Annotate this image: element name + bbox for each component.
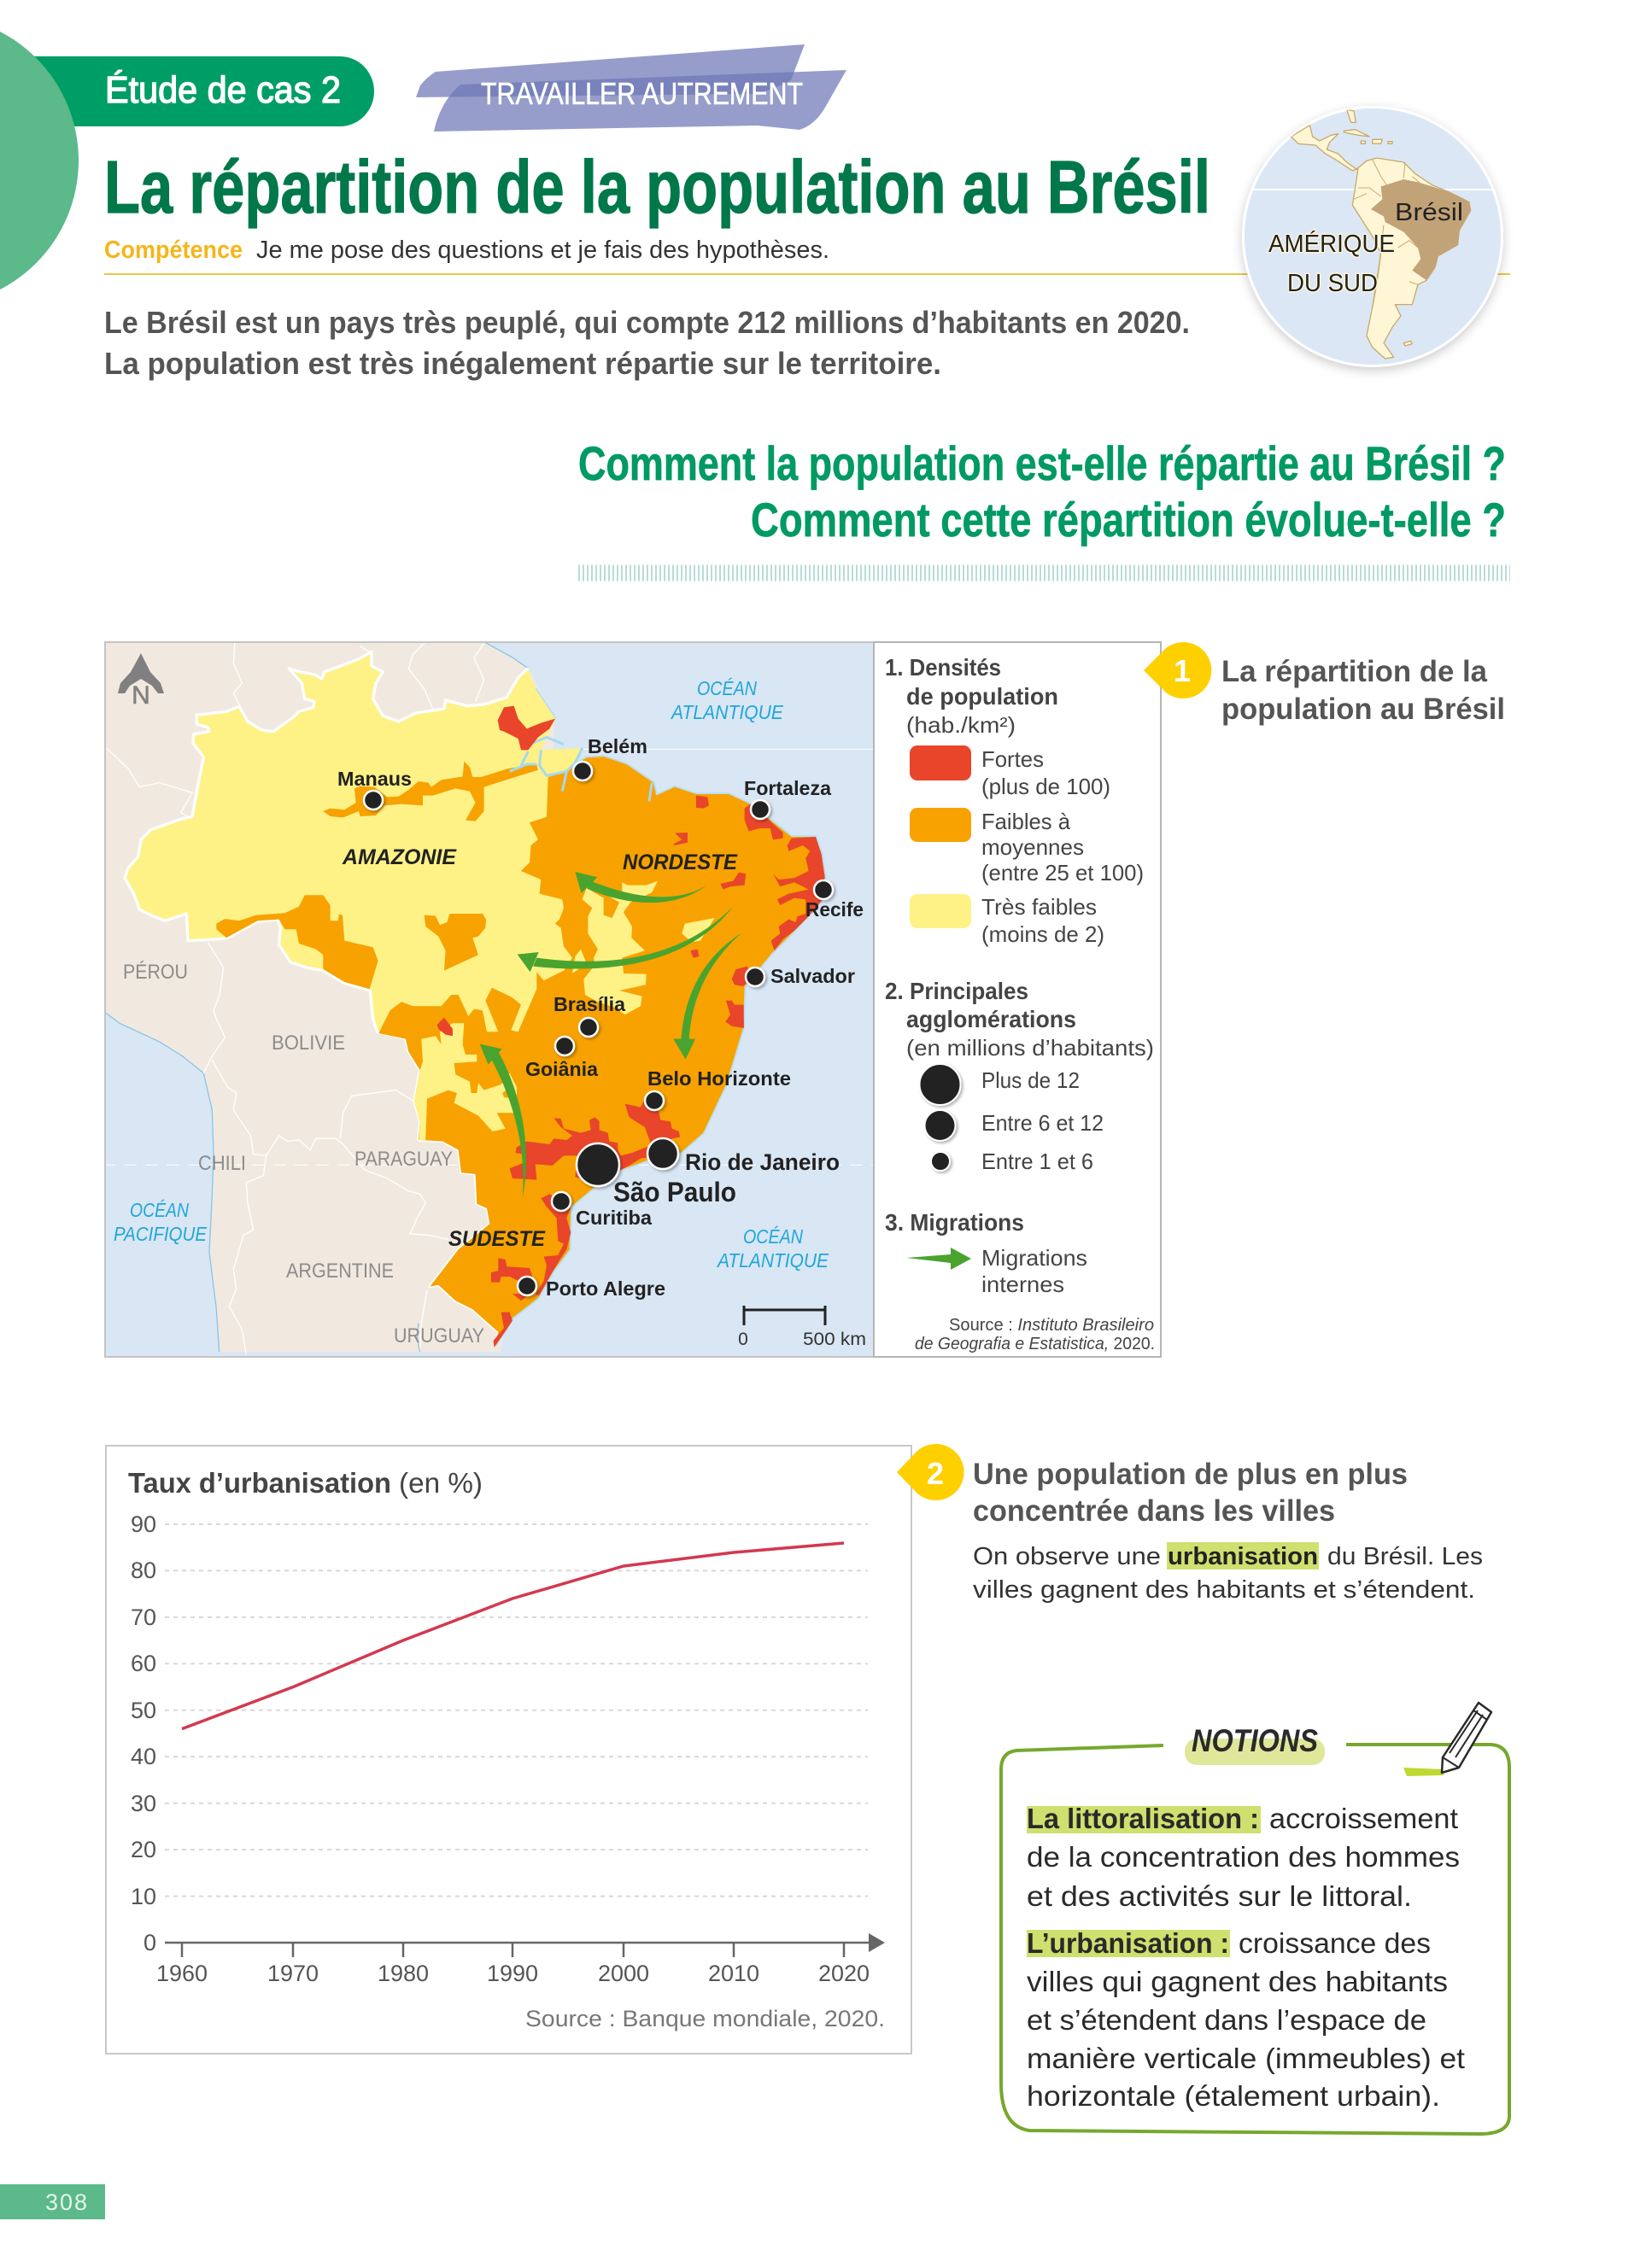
legend: source: de Geografia e Estatistica, 2020. — [915, 1335, 1155, 1353]
definition: urbanisation — [1027, 1927, 1465, 2112]
definition: littoralisation: et des activités sur le littoral. — [1027, 1880, 1412, 1912]
map panel: Brazil population density — [102, 640, 877, 1357]
legend: densities: Fortes — [981, 746, 1044, 772]
case study tag: Étude de cas 2 — [105, 69, 341, 111]
x axis: 2010 — [708, 1961, 759, 1986]
city labels: Brasília — [554, 993, 625, 1015]
notions box — [1001, 1703, 1509, 2134]
page number: 308 — [45, 2189, 87, 2215]
locator globe: DU SUD — [1287, 270, 1378, 297]
ocean labels: ATLANTIQUE — [670, 701, 784, 723]
legend: agglomerations: agglomérations — [906, 1006, 1076, 1032]
brush tag: travailler autrement: TRAVAILLER AUTREMENT — [481, 76, 803, 111]
country labels: URUGUAY — [394, 1324, 484, 1347]
x axis: 1990 — [487, 1961, 538, 1986]
legend: agglomerations: 2. Principales — [885, 978, 1028, 1004]
legend: densities: (plus de 100) — [981, 774, 1110, 799]
case study tag — [0, 56, 374, 126]
legend: source — [915, 1316, 1155, 1353]
city labels: Belo Horizonte — [647, 1067, 791, 1090]
urbanisation line — [182, 1543, 844, 1729]
legend: agglomerations: (en millions d’habitants) — [906, 1035, 1154, 1061]
y axis labels: 70 — [131, 1605, 156, 1630]
ocean labels: ATLANTIQUE — [716, 1249, 829, 1271]
city labels: Fortaleza — [744, 777, 831, 799]
icon: north arrow: N — [132, 681, 150, 710]
city labels: Rio de Janeiro — [685, 1149, 840, 1175]
document 2 text — [973, 1458, 1483, 1604]
city labels: Curitiba — [576, 1207, 652, 1229]
chart title: Taux d’urbanisation — [128, 1467, 391, 1499]
y axis labels — [131, 1511, 156, 1955]
document 2 text: villes gagnent des habitants et s’étendent. — [973, 1576, 1475, 1604]
legend: densities: de population — [906, 683, 1058, 710]
document 2 text: urbanisation — [1168, 1543, 1318, 1570]
city labels — [337, 735, 864, 1300]
country labels: CHILI — [198, 1152, 246, 1175]
y axis labels: 80 — [131, 1558, 156, 1583]
decorative green circle at page edge — [0, 15, 79, 306]
city labels: São Paulo — [613, 1177, 736, 1207]
definition: littoralisation: La littoralisation : — [1027, 1803, 1259, 1834]
badge 1: 1 — [1174, 653, 1191, 688]
definition: littoralisation: accroissement — [1269, 1803, 1458, 1834]
y axis labels: 20 — [131, 1837, 156, 1862]
document 2 text: concentrée dans les villes — [973, 1494, 1335, 1528]
region labels: NORDESTE — [623, 850, 738, 874]
country labels — [123, 961, 484, 1347]
country labels: PARAGUAY — [354, 1148, 453, 1171]
x axis — [156, 1933, 885, 1986]
ocean labels: OCÉAN — [697, 677, 757, 699]
ocean labels: PACIFIQUE — [114, 1223, 208, 1245]
city labels: Salvador — [770, 965, 855, 987]
definition: urbanisation: croissance des — [1239, 1927, 1431, 1959]
badge 1 — [1144, 642, 1211, 699]
migration arrows — [480, 872, 741, 1198]
icon: north arrow — [118, 653, 164, 710]
legend: agglomerations: Entre 6 et 12 — [981, 1110, 1104, 1136]
icon: pencil — [1403, 1703, 1491, 1776]
y axis labels: 10 — [131, 1884, 156, 1909]
chart source: Source : Banque mondiale, 2020. — [525, 2006, 885, 2031]
red density areas, south — [491, 1099, 680, 1347]
scale bar — [738, 1306, 866, 1349]
ocean labels — [114, 677, 829, 1271]
country labels: ARGENTINE — [286, 1260, 394, 1283]
document 2 text: du Brésil. Les — [1327, 1543, 1483, 1570]
legend: agglomerations: Entre 1 et 6 — [981, 1149, 1093, 1174]
definition: urbanisation: horizontale (étalement urbain). — [1027, 2080, 1440, 2112]
legend: densities: (hab./km²) — [906, 712, 1016, 738]
skill line: Je me pose des questions et je fais des hypothèses. — [256, 237, 829, 264]
city labels: Porto Alegre — [546, 1277, 665, 1300]
skill line: Compétence — [104, 237, 243, 264]
title: La répartition de la population au Brésil — [104, 146, 1210, 229]
legend: agglomerations: Plus de 12 — [981, 1067, 1080, 1093]
document 2 text: On observe une — [973, 1543, 1161, 1570]
x axis: 1980 — [378, 1961, 429, 1986]
intro text: La population est très inégalement répartie sur le territoire. — [104, 346, 941, 381]
ocean labels: OCÉAN — [130, 1199, 189, 1221]
legend: densities: (entre 25 et 100) — [981, 860, 1144, 886]
definition: urbanisation: villes qui gagnent des habitants — [1027, 1966, 1448, 1997]
x axis: 1960 — [156, 1961, 208, 1986]
document 1 heading — [1221, 655, 1505, 726]
locator globe — [1242, 106, 1503, 367]
region labels — [342, 845, 738, 1251]
definition: urbanisation: manière verticale (immeubles) et — [1027, 2043, 1465, 2074]
definition: urbanisation: et s’étendent dans l’espace de — [1027, 2004, 1426, 2036]
locator globe: Brésil — [1395, 199, 1463, 226]
country labels: PÉROU — [123, 961, 188, 984]
definition: littoralisation — [1027, 1803, 1460, 1912]
ocean labels: OCÉAN — [743, 1225, 803, 1248]
map legend — [874, 642, 1161, 1357]
chart title: (en %) — [399, 1467, 483, 1499]
legend: densities: 1. Densités — [885, 654, 1001, 681]
scale bar: 0 — [738, 1330, 748, 1349]
legend: agglomerations — [885, 978, 1154, 1174]
legend: densities: Très faibles — [981, 894, 1097, 920]
city dots — [364, 762, 833, 1295]
definition: littoralisation: de la concentration des hommes — [1027, 1841, 1460, 1873]
x axis: 2020 — [818, 1961, 870, 1986]
legend: densities — [885, 654, 1144, 947]
y axis labels: 50 — [131, 1698, 156, 1723]
y axis labels: 60 — [131, 1651, 156, 1676]
definition: urbanisation: L’urbanisation : — [1027, 1927, 1229, 1959]
city labels: Recife — [805, 898, 864, 921]
badge 2 — [897, 1444, 964, 1500]
y axis labels: 30 — [131, 1791, 156, 1816]
city labels: Manaus — [337, 768, 412, 790]
brush tag: travailler autrement — [416, 44, 846, 132]
legend: migrations: internes — [981, 1271, 1064, 1297]
intro text: Le Brésil est un pays très peuplé, qui compte 212 millions d’habitants en 2020. — [104, 305, 1190, 340]
locator globe: AMÉRIQUE — [1268, 230, 1395, 258]
legend: densities: (moins de 2) — [981, 921, 1104, 947]
y axis labels: 40 — [131, 1744, 156, 1769]
document 1 heading: population au Brésil — [1221, 693, 1505, 726]
document 2 text: Une population de plus en plus — [973, 1458, 1408, 1491]
page number — [0, 2184, 105, 2219]
city labels: Goiânia — [525, 1058, 598, 1080]
country labels: BOLIVIE — [272, 1032, 345, 1055]
notions heading: NOTIONS — [1192, 1723, 1318, 1758]
legend: densities: Faibles à — [981, 809, 1071, 834]
guiding questions — [578, 436, 1506, 547]
scale bar: 500 km — [803, 1330, 866, 1349]
document 1 heading: La répartition de la — [1221, 655, 1488, 688]
yellow patches and red density areas, north-east — [437, 706, 825, 1036]
y axis labels: 0 — [144, 1930, 156, 1955]
legend: migrations — [885, 1209, 1087, 1297]
x axis: 2000 — [598, 1961, 649, 1986]
intro text — [104, 305, 1190, 381]
legend: densities: moyennes — [981, 834, 1084, 860]
x axis: 1970 — [267, 1961, 319, 1986]
region labels: AMAZONIE — [342, 845, 457, 869]
legend: source: Source : Instituto Brasileiro — [949, 1316, 1154, 1335]
chart panel: urbanisation rate — [106, 1446, 911, 2054]
city labels: Belém — [588, 735, 647, 757]
legend: migrations: 3. Migrations — [885, 1209, 1024, 1236]
region labels: SUDESTE — [448, 1227, 546, 1251]
badge 2: 2 — [927, 1456, 944, 1491]
legend: migrations: Migrations — [981, 1245, 1087, 1271]
y axis labels: 90 — [131, 1511, 156, 1537]
